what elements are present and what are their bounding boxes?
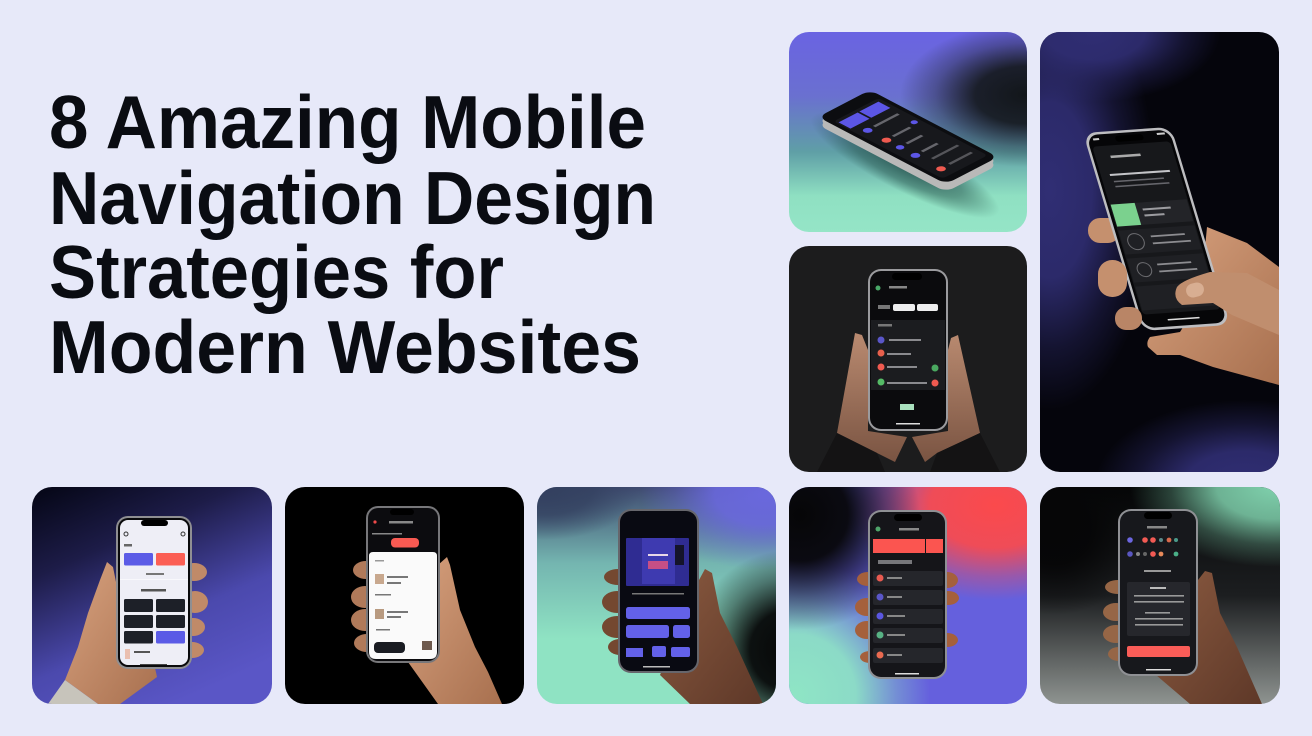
title: 8 Amazing Mobile (49, 80, 646, 164)
fingers (1103, 580, 1118, 661)
fingers (192, 563, 208, 658)
phone: bottom sheet menu (366, 506, 440, 663)
left and right hands (837, 333, 980, 462)
panel: two hands holding phone on charcoal (789, 246, 1027, 472)
fingers (602, 569, 618, 655)
panel: tilted floating phone on purple-mint gradient (789, 32, 1027, 232)
phone: light navigation grid (116, 516, 192, 669)
hand (65, 562, 157, 704)
title (49, 80, 656, 389)
phone: isometric dark navigation screen (818, 90, 998, 192)
sleeves (817, 433, 1000, 472)
hand (660, 569, 763, 704)
panel: hand with white screen phone on indigo gradient (32, 487, 272, 704)
panel: hand holding phone on navy gradient (1040, 32, 1279, 472)
panel: hand with sheet menu phone on black (285, 487, 524, 704)
fingers (855, 572, 959, 663)
title: Navigation Design (49, 156, 656, 240)
phone: red header and list rows (868, 510, 947, 679)
hand behind phone (1147, 227, 1279, 385)
phone: dark list screen (1083, 127, 1230, 331)
panel: hand with purple-button phone on mint gradient (537, 487, 776, 704)
phone: dark list screen (868, 269, 948, 431)
left fingers behind phone (1088, 218, 1116, 243)
panel: hand with dots and alert phone on mint-grey gradient (1040, 487, 1280, 704)
phone: dots and dialog (1118, 509, 1198, 676)
thumb and fingers over phone (1098, 260, 1279, 335)
title: Modern Websites (49, 305, 641, 389)
fingers (351, 561, 366, 652)
hand (403, 557, 502, 704)
hand (1156, 571, 1262, 704)
sweater cuff (48, 680, 98, 704)
phone: purple tiles (618, 509, 699, 673)
panel: hand with red-tab phone on red-purple-mint gradient (789, 487, 1027, 704)
title: Strategies for (49, 230, 504, 314)
